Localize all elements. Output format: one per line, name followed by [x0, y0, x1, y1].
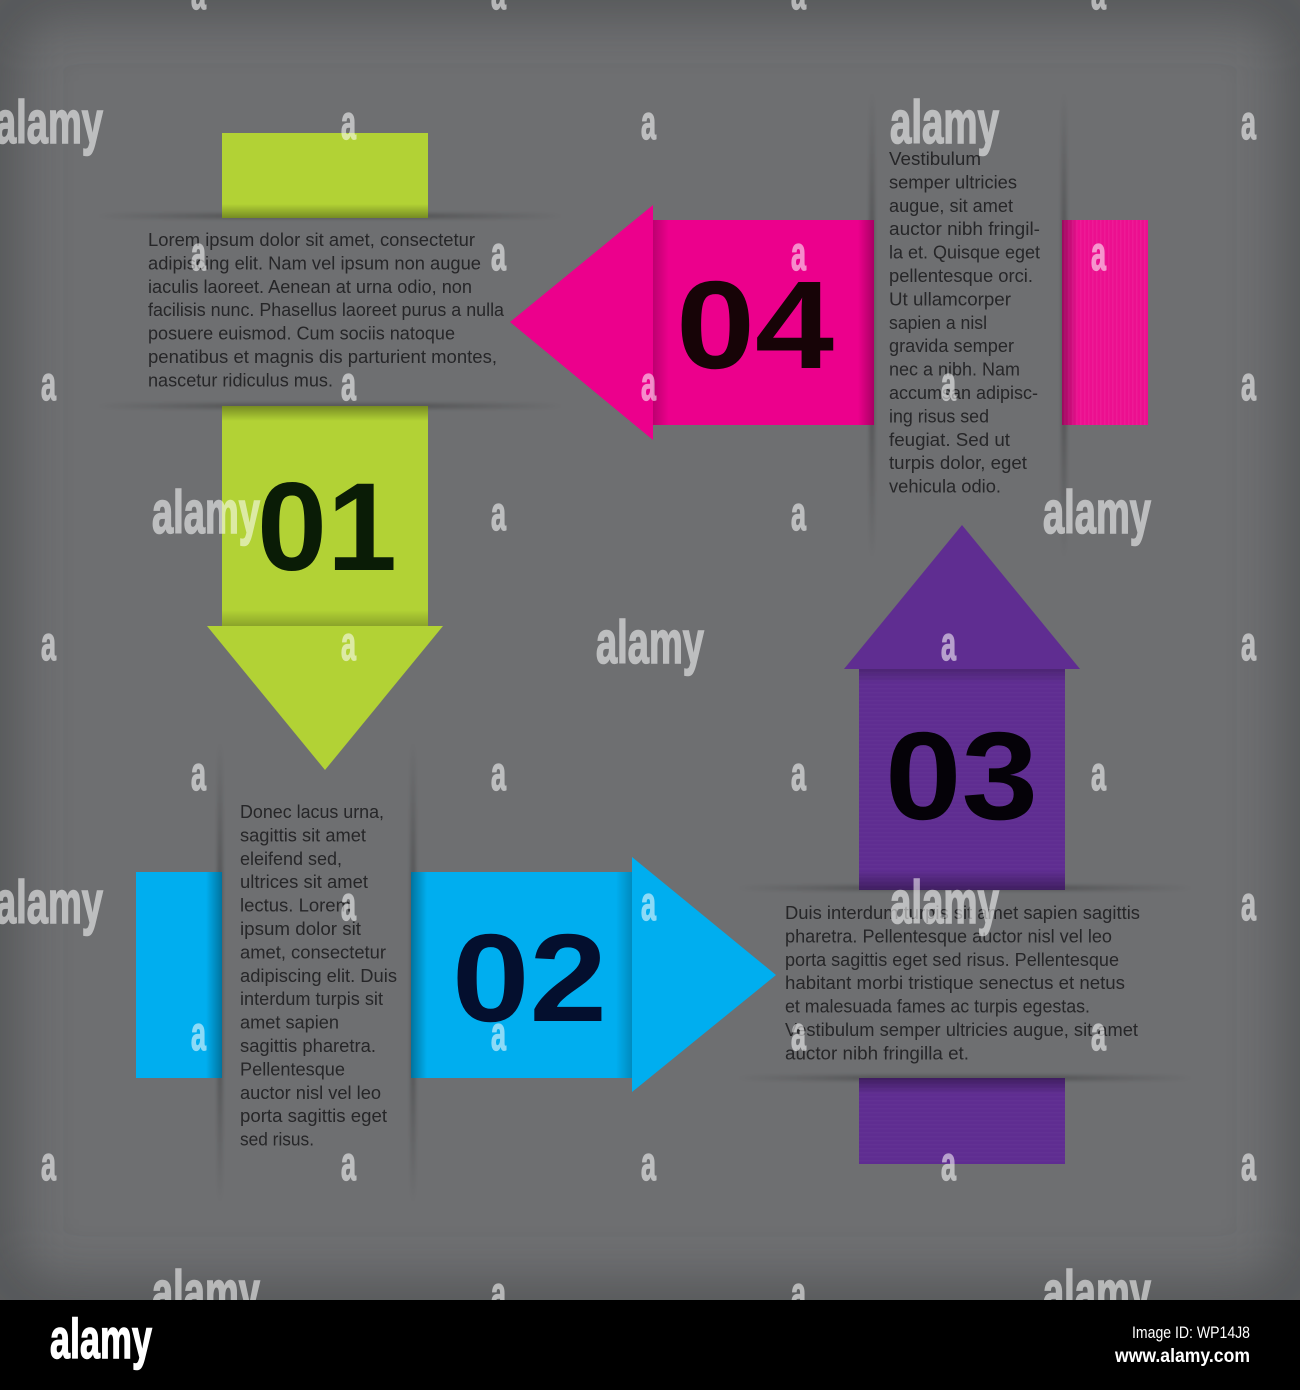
arrow 02: blue, pointing right [136, 857, 776, 1092]
number 04: 04 [676, 256, 834, 395]
text block 03: et malesuada fames ac turpis egestas. [785, 997, 1090, 1017]
watermarks: a [1241, 878, 1256, 931]
watermarks: a [641, 97, 656, 150]
text block 04: pellentesque orci. [889, 266, 1033, 286]
watermarks: a [491, 228, 506, 281]
footer logo: alamy [50, 1307, 152, 1370]
text block 02: interdum turpis sit [240, 989, 383, 1009]
text block 01: posuere euismod. Cum sociis natoque [148, 324, 455, 344]
watermarks: alamy [596, 609, 704, 676]
watermarks: a [191, 228, 206, 281]
text block 04: la et. Quisque eget [889, 243, 1040, 263]
watermarks: a [41, 358, 56, 411]
watermarks: alamy [890, 869, 999, 936]
text block 04 [889, 149, 1040, 497]
watermarks: a [191, 748, 206, 801]
text block 04: feugiat. Sed ut [889, 430, 1010, 450]
text block 04: turpis dolor, eget [889, 453, 1027, 473]
watermarks: a [491, 1268, 506, 1321]
number 03: 03 [885, 707, 1038, 846]
watermarks: alamy [1043, 479, 1151, 546]
text block 03 [785, 903, 1140, 1063]
number 02: 02 [452, 909, 607, 1048]
text block 02: ultrices sit amet [240, 872, 368, 892]
image id: Image ID: WP14J8 [1132, 1323, 1250, 1342]
arrow 03: purple, pointing up [844, 525, 1080, 1164]
text block 03: Vestibulum semper ultricies augue, sit amet [785, 1020, 1138, 1040]
website: www.alamy.com [1114, 1346, 1250, 1367]
text block 02: amet, consectetur [240, 942, 386, 962]
text block 04: semper ultricies [889, 172, 1017, 192]
watermarks: a [1241, 358, 1256, 411]
watermarks: a [1091, 748, 1106, 801]
text block 01: penatibus et magnis dis parturient montes, [148, 347, 497, 367]
text block 04: vehicula odio. [889, 477, 1001, 497]
watermarks: a [641, 878, 656, 931]
watermarks: a [791, 1008, 806, 1061]
watermarks: a [341, 358, 356, 411]
watermarks: a [791, 488, 806, 541]
panel shadow edges [95, 90, 1195, 1205]
text block 04: gravida semper [889, 336, 1014, 356]
text block 04: Vestibulum [889, 149, 981, 169]
watermarks: a [941, 358, 956, 411]
text block 04: accumsan adipisc- [889, 383, 1038, 403]
text block 01: nascetur ridiculus mus. [148, 370, 333, 390]
text block 01: facilisis nunc. Phasellus laoreet purus a nulla [148, 300, 505, 320]
text block 04: ing risus sed [889, 406, 989, 426]
text block 03: porta sagittis eget sed risus. Pellentesque [785, 950, 1119, 970]
watermarks: a [791, 1268, 806, 1321]
watermarks: a [491, 748, 506, 801]
number 01: 01 [257, 458, 397, 597]
watermarks: a [341, 1138, 356, 1191]
text block 02: sagittis sit amet [240, 825, 366, 845]
watermarks: a [1091, 228, 1106, 281]
watermarks: a [1241, 1138, 1256, 1191]
watermarks: a [341, 878, 356, 931]
text block 02: sed risus. [240, 1130, 314, 1150]
watermarks: a [941, 1138, 956, 1191]
watermarks: a [491, 1008, 506, 1061]
text block 02 [240, 802, 397, 1150]
text block 04: nec a nibh. Nam [889, 360, 1020, 380]
watermarks: a [491, 488, 506, 541]
watermarks: a [641, 1138, 656, 1191]
text block 03: habitant morbi tristique senectus et netus [785, 973, 1125, 993]
text block 03: Duis interdum turpis sit amet sapien sagittis [785, 903, 1140, 923]
watermarks: a [1241, 97, 1256, 150]
watermarks: alamy [0, 869, 103, 936]
arrow 01: green, pointing down [207, 133, 443, 770]
text block 03: auctor nibh fringilla et. [785, 1043, 969, 1063]
watermarks: a [641, 358, 656, 411]
text block 02: adipiscing elit. Duis [240, 966, 397, 986]
arrow 04: magenta, pointing left [510, 205, 1148, 440]
watermarks: alamy [152, 1259, 260, 1326]
text block 02: ipsum dolor sit [240, 919, 361, 939]
text block 04: sapien a nisl [889, 313, 987, 333]
text block 02: sagittis pharetra. [240, 1036, 376, 1056]
text block 01: Lorem ipsum dolor sit amet, consectetur [148, 230, 475, 250]
text block 02: Pellentesque [240, 1059, 345, 1079]
watermarks: a [1091, 1008, 1106, 1061]
watermarks: a [41, 618, 56, 671]
watermarks: a [1241, 618, 1256, 671]
text block 02: amet sapien [240, 1013, 339, 1033]
watermarks: alamy [1043, 1259, 1151, 1326]
text block 02: auctor nisl vel leo [240, 1083, 381, 1103]
watermarks: a [791, 748, 806, 801]
text block 04: auctor nibh fringil- [889, 219, 1040, 239]
watermarks: a [191, 1008, 206, 1061]
text block 01: iaculis laoreet. Aenean at urna odio, non [148, 277, 472, 297]
watermarks: alamy [0, 89, 103, 156]
text block 02: eleifend sed, [240, 849, 342, 869]
watermarks: alamy [152, 479, 260, 546]
watermarks: a [941, 618, 956, 671]
watermarks: a [41, 1138, 56, 1191]
text block 02: Donec lacus urna, [240, 802, 384, 822]
text block 02: lectus. Lorem [240, 896, 351, 916]
watermarks: a [791, 228, 806, 281]
text block 02: porta sagittis eget [240, 1106, 387, 1126]
watermarks: a [341, 97, 356, 150]
footer bar [0, 1300, 1300, 1390]
watermarks: a [341, 618, 356, 671]
watermarks: alamy [890, 89, 999, 156]
text block 04: augue, sit amet [889, 196, 1013, 216]
text block 01 [148, 230, 505, 390]
text block 04: Ut ullamcorper [889, 289, 1011, 309]
text block 01: adipiscing elit. Nam vel ipsum non augue [148, 253, 481, 273]
text block 03: pharetra. Pellentesque auctor nisl vel leo [785, 926, 1112, 946]
